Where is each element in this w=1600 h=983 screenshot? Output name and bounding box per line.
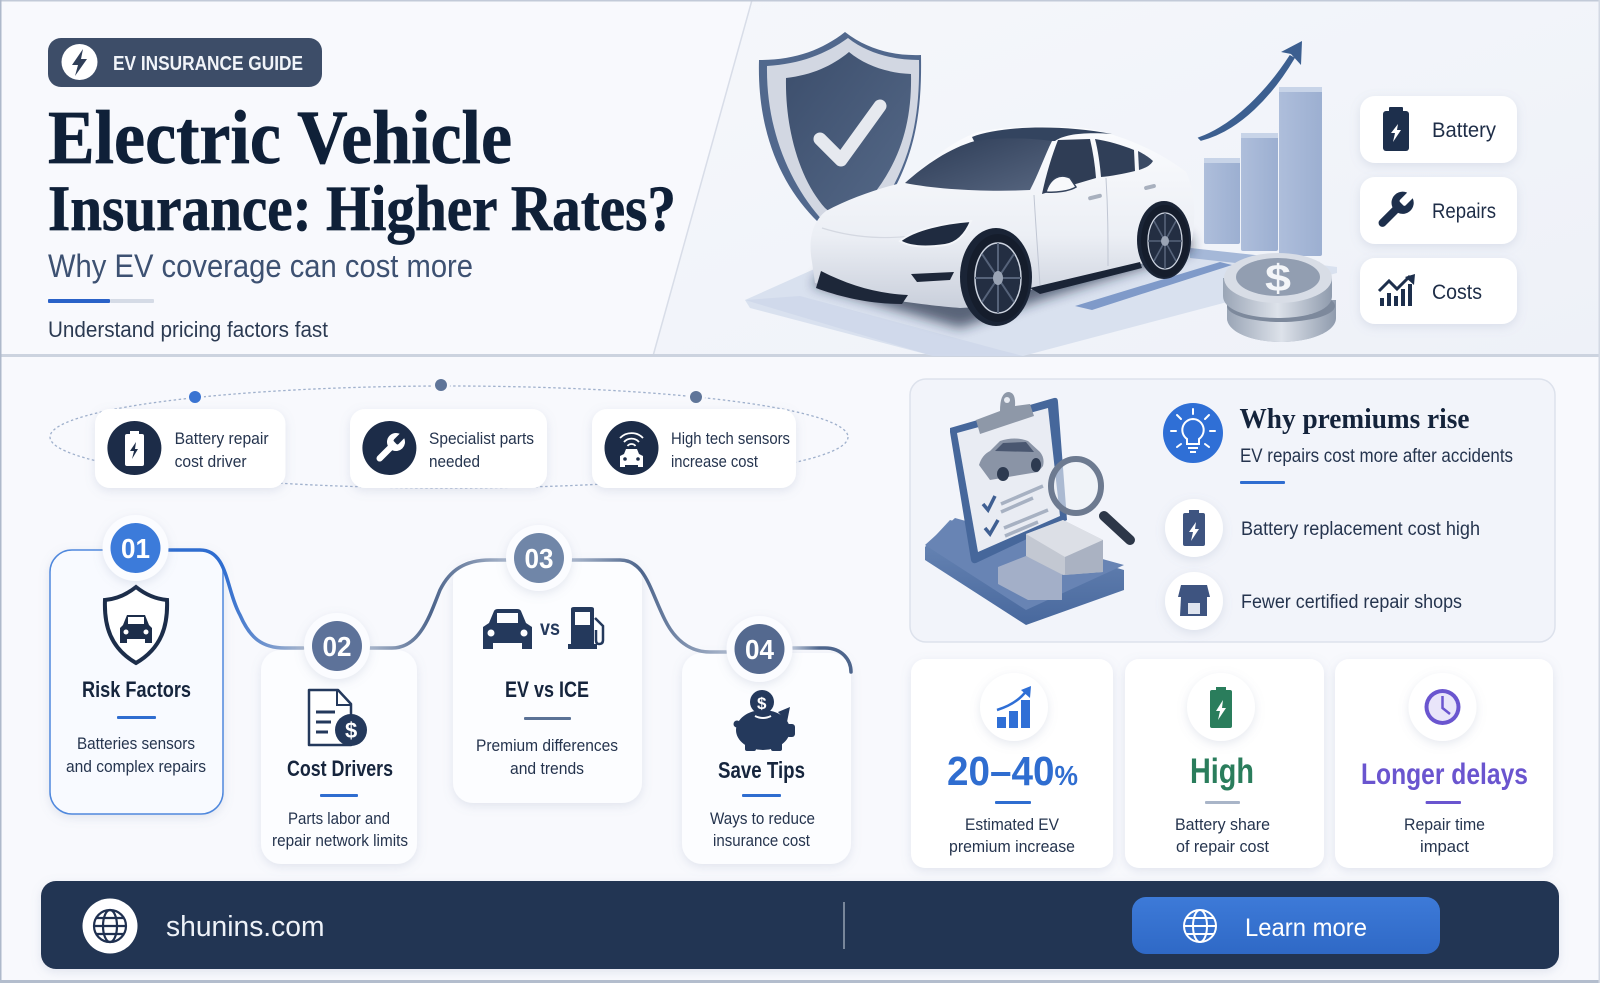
- badge 02: [304, 613, 370, 679]
- step card 3: Premium differences: [476, 736, 618, 755]
- callout: specialist parts: [350, 409, 547, 488]
- mirror: [1046, 176, 1076, 192]
- stat card: repair delays: [1335, 659, 1553, 868]
- stat card: battery share: of repair cost: [1176, 837, 1269, 856]
- car roof: [972, 128, 1112, 143]
- title: Electric Vehicle: [48, 96, 512, 180]
- hero right background: [653, 0, 1600, 356]
- panel heading: Why premiums rise: [1240, 403, 1470, 435]
- icon: shield car: [105, 587, 167, 663]
- icon: piggy bank: [734, 690, 795, 751]
- orbit dots: [186, 376, 705, 406]
- row: repair shops: [1165, 572, 1462, 630]
- stat card: battery share: Battery share: [1175, 815, 1270, 834]
- car: [811, 126, 1194, 328]
- callout: sensors: [592, 409, 796, 488]
- icon: car with signal: [620, 433, 643, 467]
- section: four-step path: [50, 515, 851, 864]
- icon: clock: [1424, 689, 1460, 725]
- panel: why premiums rise: EV repairs cost more after accidents: [1240, 446, 1513, 467]
- headlight: [900, 221, 971, 246]
- step card 1: [50, 550, 223, 814]
- badge 03: 03: [524, 543, 554, 574]
- icon: wrench: [376, 433, 405, 462]
- callout: sensors: increase cost: [671, 452, 758, 471]
- stat card: battery share: High: [1190, 752, 1254, 791]
- panel: hero header: [0, 0, 1600, 357]
- clipboard: [950, 398, 1067, 563]
- website: shunins.com: [166, 911, 324, 943]
- panel: why premiums rise: [910, 379, 1555, 642]
- chip: Costs: [1360, 258, 1517, 324]
- callout: specialist parts: needed: [429, 452, 480, 471]
- mini car: [979, 438, 1044, 480]
- illustration: car with shield and chart: [745, 32, 1337, 356]
- icon: rising chart: [997, 686, 1031, 728]
- step card 2: Cost Drivers: [287, 756, 393, 781]
- rising bars: [1204, 87, 1322, 256]
- chip: Repairs: [1360, 177, 1517, 244]
- stat card: repair delays: impact: [1420, 837, 1469, 856]
- step card 2: Parts labor and: [288, 809, 390, 828]
- dashed orbit: [50, 386, 848, 488]
- boxes: [998, 556, 1062, 600]
- illustration: clipboard and magnifier: [925, 392, 1130, 625]
- step card 3: [453, 560, 642, 803]
- step card 4: Ways to reduce: [710, 809, 815, 828]
- chip: Battery: Battery: [1432, 119, 1496, 142]
- step card 4: insurance cost: [713, 831, 810, 850]
- icon: cost chart: [1379, 274, 1415, 306]
- magnifier: [1051, 459, 1101, 513]
- chip: Costs: Costs: [1432, 281, 1482, 304]
- stat card: repair delays: Repair time: [1404, 815, 1485, 834]
- title: Insurance: Higher Rates?: [48, 173, 676, 245]
- checklist: [983, 496, 998, 534]
- stat card: premium increase: [911, 659, 1113, 868]
- footer bar: [41, 881, 1559, 969]
- callout: battery repair: Battery repair: [175, 429, 269, 448]
- icon: wrench: [1379, 192, 1414, 227]
- stat card: battery share: [1125, 659, 1324, 868]
- tagline: Understand pricing factors fast: [48, 317, 328, 342]
- icon: battery: [125, 431, 144, 466]
- coin stack: $: [1265, 258, 1291, 300]
- badge 04: [726, 616, 792, 682]
- subtitle: Why EV coverage can cost more: [48, 248, 473, 284]
- badge 01: 01: [121, 533, 150, 564]
- row: battery replacement: Battery replacement cost high: [1241, 519, 1480, 540]
- callout: battery repair: cost driver: [175, 452, 247, 471]
- icon: green battery: [1210, 687, 1232, 728]
- door lines: [1034, 178, 1108, 285]
- row: repair shops: Fewer certified repair shops: [1241, 592, 1462, 613]
- stat card: premium increase: Estimated EV: [965, 815, 1060, 834]
- badge: EV insurance guide: [48, 38, 322, 87]
- step card 3: and trends: [510, 759, 584, 778]
- title: [48, 96, 676, 245]
- icon: battery: [1383, 107, 1409, 151]
- coin stack: [1223, 253, 1336, 342]
- icon: EV vs fuel pump: [483, 607, 603, 649]
- step card 2: [261, 650, 417, 864]
- stat card: premium increase: 20–40%: [947, 748, 1078, 794]
- step card 4: Save Tips: [718, 757, 805, 783]
- stat card: premium increase: premium increase: [949, 837, 1075, 856]
- rear wheel: [1137, 201, 1191, 279]
- badge: EV insurance guide: EV INSURANCE GUIDE: [113, 53, 303, 75]
- grille: [816, 271, 908, 304]
- badge 04: 04: [745, 634, 774, 665]
- front wheel: [960, 228, 1032, 326]
- badge 03: [506, 525, 572, 591]
- chip: Repairs: Repairs: [1432, 200, 1496, 223]
- icon: document with dollar: [309, 690, 367, 746]
- step card 3: EV vs ICE: [505, 677, 589, 702]
- badge 02: 02: [322, 631, 352, 662]
- icon: document with dollar: $: [345, 718, 357, 743]
- icon: globe: [82, 898, 138, 954]
- shield: [759, 32, 921, 250]
- stat card: repair delays: Longer delays: [1361, 758, 1528, 791]
- trend arrow: [1199, 41, 1302, 140]
- step card 1: and complex repairs: [66, 757, 206, 776]
- button: learn more: [1132, 897, 1440, 954]
- badge 01: [102, 515, 168, 581]
- step card 1: Batteries sensors: [77, 734, 195, 753]
- icon: lightbulb: [1163, 403, 1223, 463]
- windows: [905, 138, 1052, 191]
- platform base: [925, 520, 1124, 625]
- icon: piggy bank: $: [757, 694, 767, 713]
- connector line: [169, 550, 851, 672]
- step card 1: Risk Factors: [82, 677, 191, 702]
- icon: EV vs fuel pump: vs: [540, 617, 560, 640]
- step card 4: [682, 653, 851, 864]
- callout: sensors: High tech sensors: [671, 429, 790, 448]
- step card 2: repair network limits: [272, 831, 408, 850]
- button: learn more: Learn more: [1245, 914, 1367, 942]
- row: battery replacement: [1165, 499, 1480, 557]
- platform: [745, 240, 1337, 356]
- callout: battery repair: [95, 409, 286, 488]
- chip: Battery: [1360, 96, 1517, 163]
- callout: specialist parts: Specialist parts: [429, 429, 534, 448]
- section: key cost callouts: [50, 376, 848, 488]
